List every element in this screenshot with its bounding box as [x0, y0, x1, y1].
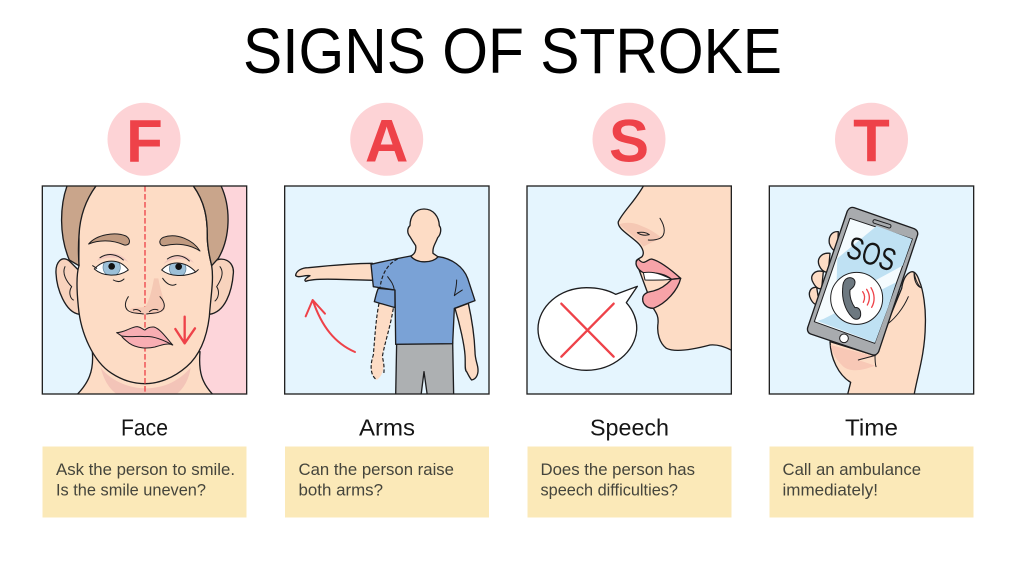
heading: Time: Time	[845, 414, 898, 440]
eye shadows	[97, 253, 194, 264]
badge: letter F	[108, 103, 180, 176]
fingers	[809, 232, 838, 304]
profile face	[618, 185, 733, 351]
text box: time	[770, 446, 974, 518]
heading: Face: Face	[121, 414, 168, 440]
panel: speech illustration	[527, 185, 733, 394]
phone	[807, 207, 918, 355]
face outline	[77, 185, 212, 384]
text box: time: Call an ambulance	[782, 460, 921, 479]
text box: arms	[285, 446, 489, 518]
text box: speech	[528, 446, 732, 518]
call circle	[831, 272, 883, 324]
lowered sleeve	[374, 288, 395, 308]
panel: raised arm illustration	[285, 186, 489, 396]
title: SIGNS OF STROKE	[243, 15, 782, 87]
home button	[840, 334, 848, 343]
badge: letter S	[592, 103, 666, 176]
raise arrow	[306, 300, 355, 352]
badge: letter T	[835, 103, 908, 176]
text box: arms: both arms?	[298, 480, 383, 500]
nostril	[637, 218, 664, 240]
head	[408, 209, 441, 262]
hair	[62, 185, 97, 266]
text box: speech: Does the person has	[540, 460, 695, 479]
text box: time: immediately!	[782, 480, 878, 500]
badge: letter S: S	[609, 108, 649, 174]
neck	[76, 352, 214, 396]
text box: speech: speech difficulties?	[540, 480, 678, 500]
screen	[814, 218, 912, 343]
speaker	[873, 219, 891, 228]
trousers	[396, 342, 454, 396]
midline	[144, 186, 146, 392]
panel: phone call illustration	[769, 186, 974, 396]
hand	[830, 272, 925, 396]
heading: Speech: Speech	[590, 414, 669, 440]
text box: face	[42, 446, 246, 518]
text box: face: Ask the person to smile.	[56, 460, 235, 479]
dashed lowered arm	[371, 303, 393, 380]
nose shadow	[619, 223, 662, 247]
droop arrow	[175, 317, 195, 343]
cross	[561, 304, 614, 357]
text box: face: Is the smile uneven?	[56, 480, 206, 500]
text box: arms: Can the person raise	[298, 460, 454, 479]
SOS text: SOS	[843, 229, 901, 278]
sound waves	[863, 288, 874, 307]
speech bubble	[538, 286, 637, 370]
badge: letter A: A	[365, 108, 408, 174]
handset icon	[842, 278, 861, 319]
left eye	[93, 255, 128, 282]
shirt	[371, 256, 475, 344]
heading: Arms: Arms	[359, 414, 415, 440]
right eye	[162, 256, 198, 285]
lips	[636, 259, 681, 308]
panel: face illustration	[42, 185, 247, 396]
badge: letter A	[350, 103, 423, 176]
nose	[125, 278, 165, 314]
eyebrows	[89, 234, 129, 245]
badge: letter F: F	[126, 108, 163, 174]
right arm	[455, 303, 478, 380]
mouth	[117, 327, 173, 348]
badge: letter T: T	[853, 108, 890, 174]
ears	[56, 259, 233, 314]
raised arm	[296, 263, 374, 281]
